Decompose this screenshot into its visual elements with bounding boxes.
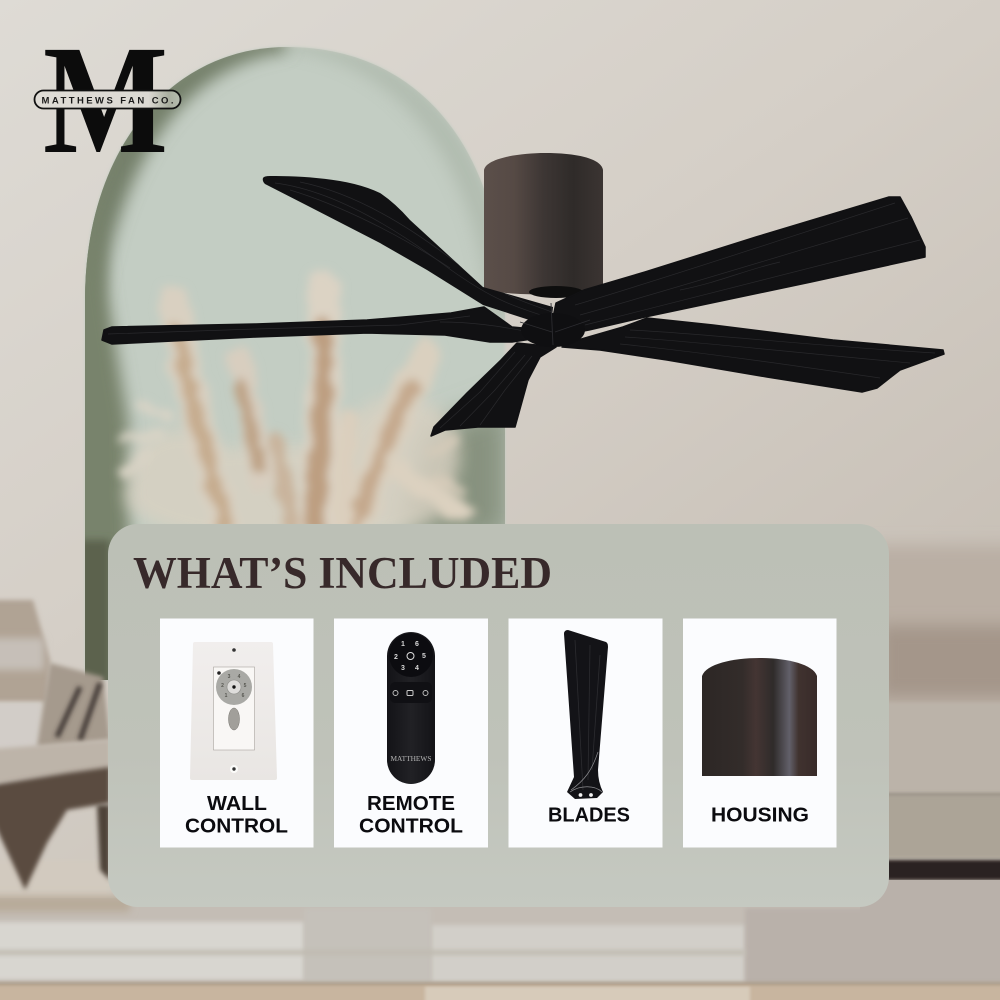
icon: remote: 2: [394, 654, 398, 661]
logo: Matthews Fan Co.: MATTHEWS FAN CO.: [42, 95, 174, 106]
card: wall control: CONTROL: [185, 814, 288, 838]
icon: blade: [564, 630, 608, 799]
arched wall niche: [84, 46, 505, 680]
icon: remote: 5: [422, 653, 426, 660]
motor hub: [520, 303, 590, 347]
icon: remote: 4: [415, 665, 419, 672]
fan housing: [484, 153, 603, 298]
icon: remote: 6: [415, 641, 419, 648]
icon: remote: 1: [401, 641, 405, 648]
label: HOUSING: [711, 804, 809, 826]
blade: lower centre: [431, 343, 556, 436]
floor: [0, 860, 1000, 1000]
panel: what's included: [108, 524, 889, 907]
card: remote control: [334, 618, 488, 848]
icon: housing: [702, 658, 817, 776]
ceiling fan: [102, 153, 944, 436]
label: WALL: [207, 792, 267, 815]
pampas grass: [122, 285, 465, 545]
blade: lower right: [562, 318, 944, 392]
icon: wall control: 5: [244, 683, 247, 689]
label: BLADES: [548, 804, 630, 826]
card: housing: [683, 618, 836, 848]
icon: remote: MATTHEWS: [390, 756, 432, 763]
icon: remote: 3: [401, 665, 405, 672]
card: blades: [508, 618, 662, 848]
heading: WHAT’S INCLUDED: [133, 548, 552, 598]
blade: upper left: [263, 176, 553, 327]
icon: wall control: 2: [221, 683, 224, 689]
icon: remote: [387, 632, 435, 784]
card: wall control: [160, 618, 314, 848]
card: remote control: CONTROL: [359, 814, 463, 838]
icon: wall control: 1: [225, 693, 228, 699]
blade: upper right: [551, 197, 925, 337]
sofa: [860, 545, 1000, 880]
icon: wall control: 4: [238, 674, 241, 680]
label: REMOTE: [367, 792, 455, 815]
blade: left: [102, 307, 545, 344]
icon: wall control: [190, 642, 277, 780]
logo: Matthews Fan Co.: M: [43, 13, 168, 186]
icon: wall control: 6: [242, 693, 245, 699]
armchair with throw: [0, 600, 110, 890]
icon: wall control: 3: [228, 674, 231, 680]
